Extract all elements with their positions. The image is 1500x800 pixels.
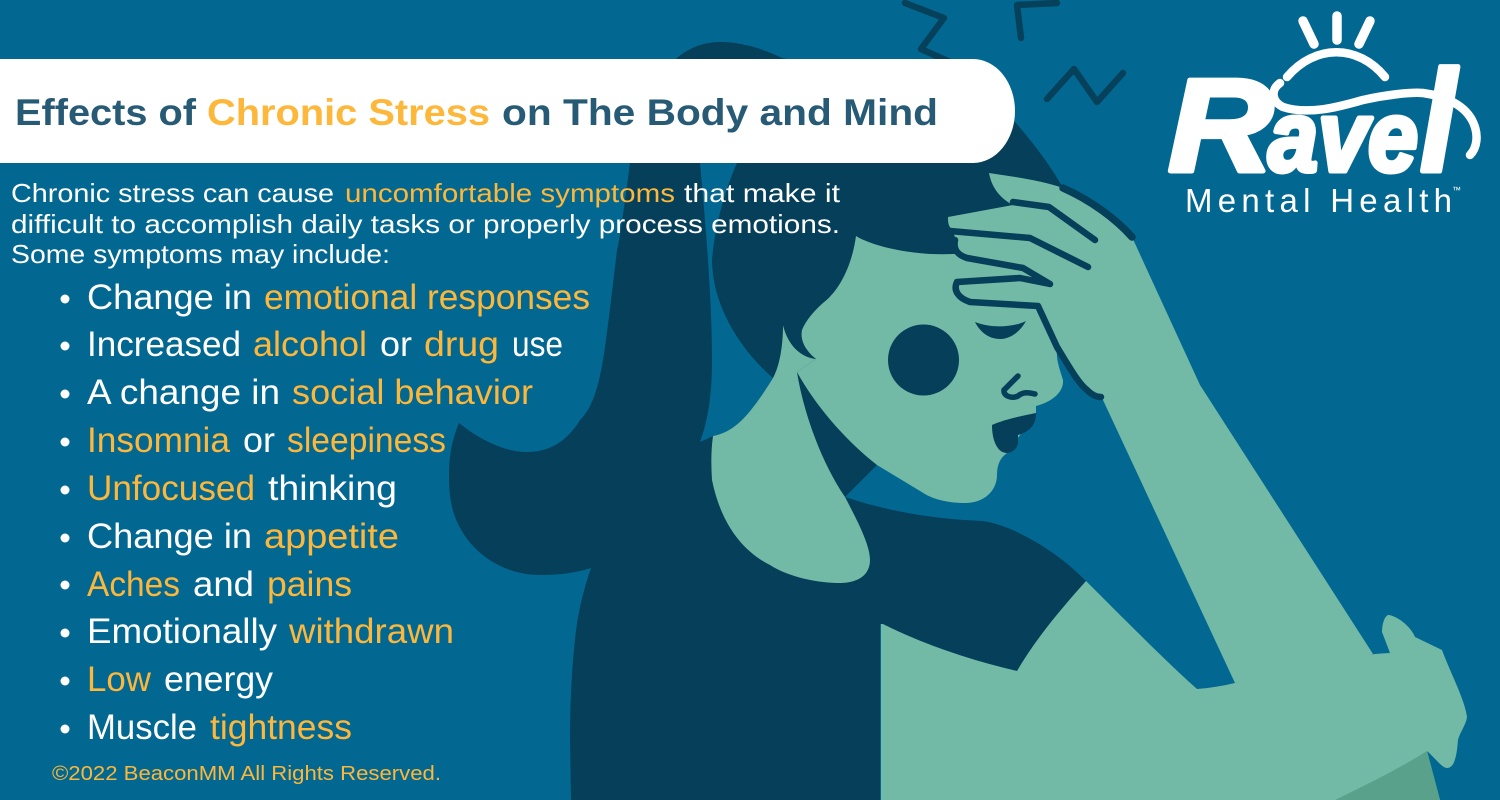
intro paragraph: Some symptoms may include: (11, 239, 390, 269)
title text: on The Body and Mind (502, 92, 938, 133)
title text (15, 92, 938, 133)
symptom: unfocused thinking: thinking (268, 469, 397, 508)
symptom: emotionally withdrawn: Emotionally (87, 612, 278, 651)
symptom: muscle tightness: Muscle (87, 708, 197, 747)
symptom: insomnia or sleepiness: or (243, 421, 275, 460)
hair tip on cheek (783, 320, 816, 359)
hair and shirt silhouette (449, 42, 1086, 800)
symptom: alcohol or drug use (87, 325, 563, 364)
gap between hair strands (700, 163, 773, 442)
logo wordmark: l (1420, 41, 1459, 202)
symptom: aches and pains (87, 565, 352, 604)
symptom: appetite: Change in (87, 517, 252, 556)
banner background (0, 59, 1015, 163)
title text: Chronic Stress (207, 92, 490, 133)
icon: sun rays and arc (1287, 16, 1385, 77)
symptom: emotional responses: emotional responses (264, 278, 590, 317)
symptom: aches and pains: Aches (87, 565, 180, 604)
intro paragraph: uncomfortable symptoms (345, 178, 675, 208)
symptom: unfocused thinking (87, 469, 397, 508)
symptom: insomnia or sleepiness: Insomnia (87, 421, 231, 460)
intro paragraph: that make it (684, 178, 841, 208)
symptom: low energy: Low (87, 660, 152, 699)
logo subtitle: Mental Health (1185, 182, 1452, 219)
logo wordmark: R (1168, 52, 1273, 199)
symptom: appetite: appetite (264, 517, 399, 556)
upper arm and sleeve (881, 581, 1467, 800)
shadowed arm detail (1335, 751, 1440, 800)
intro paragraph (11, 178, 841, 269)
logo wordmark (1168, 41, 1459, 202)
symptom: emotionally withdrawn: withdrawn (288, 612, 454, 651)
symptom: emotional responses: Change in (87, 278, 252, 317)
icon: stress zigzag marks (905, 3, 1123, 102)
symptom: low energy (87, 660, 273, 699)
symptom: emotionally withdrawn (87, 612, 454, 651)
title text: Effects of (15, 92, 197, 133)
nose line (1004, 376, 1035, 397)
symptom: muscle tightness: tightness (210, 708, 352, 747)
symptom: unfocused thinking: Unfocused (87, 469, 255, 508)
symptom: alcohol or drug use: alcohol (253, 325, 367, 364)
symptom: appetite (87, 517, 399, 556)
closed eye (975, 321, 1026, 339)
symptom: aches and pains: and (193, 565, 254, 604)
intro paragraph: difficult to accomplish daily tasks or properly process emotions. (11, 209, 840, 239)
mouth (992, 413, 1036, 453)
neck and hair lock (711, 325, 870, 583)
symptom: alcohol or drug use: use (512, 325, 563, 364)
forearm and hand (948, 173, 1373, 683)
trademark mark: ™ (1452, 185, 1461, 195)
symptom: alcohol or drug use: drug (424, 325, 499, 364)
symptom: alcohol or drug use: Increased (87, 325, 241, 364)
face (797, 236, 1063, 503)
illustration: stressed woman holding her head (449, 3, 1467, 800)
intro paragraph: Chronic stress can cause (11, 178, 334, 208)
symptom: muscle tightness (87, 708, 352, 747)
title banner (0, 59, 1015, 163)
symptom: social behavior: A change in (87, 373, 280, 412)
logo: Ravel Mental Health (1168, 16, 1477, 219)
logo wordmark: ave (1268, 81, 1418, 193)
symptom: aches and pains: pains (267, 565, 352, 604)
symptom list (60, 278, 590, 747)
symptom: alcohol or drug use: or (380, 325, 412, 364)
bullet markers (60, 294, 70, 734)
icon: logo swoosh (1274, 83, 1477, 155)
copyright notice: ©2022 BeaconMM All Rights Reserved. (52, 763, 441, 785)
symptom: insomnia or sleepiness: sleepiness (287, 421, 446, 460)
symptom: emotional responses (87, 278, 590, 317)
cheek circle (888, 324, 959, 396)
symptom: insomnia or sleepiness (87, 421, 446, 460)
symptom: social behavior (87, 373, 533, 412)
symptom: social behavior: social behavior (292, 373, 533, 412)
symptom: low energy: energy (164, 660, 273, 699)
hand and finger outlines (950, 188, 1132, 397)
